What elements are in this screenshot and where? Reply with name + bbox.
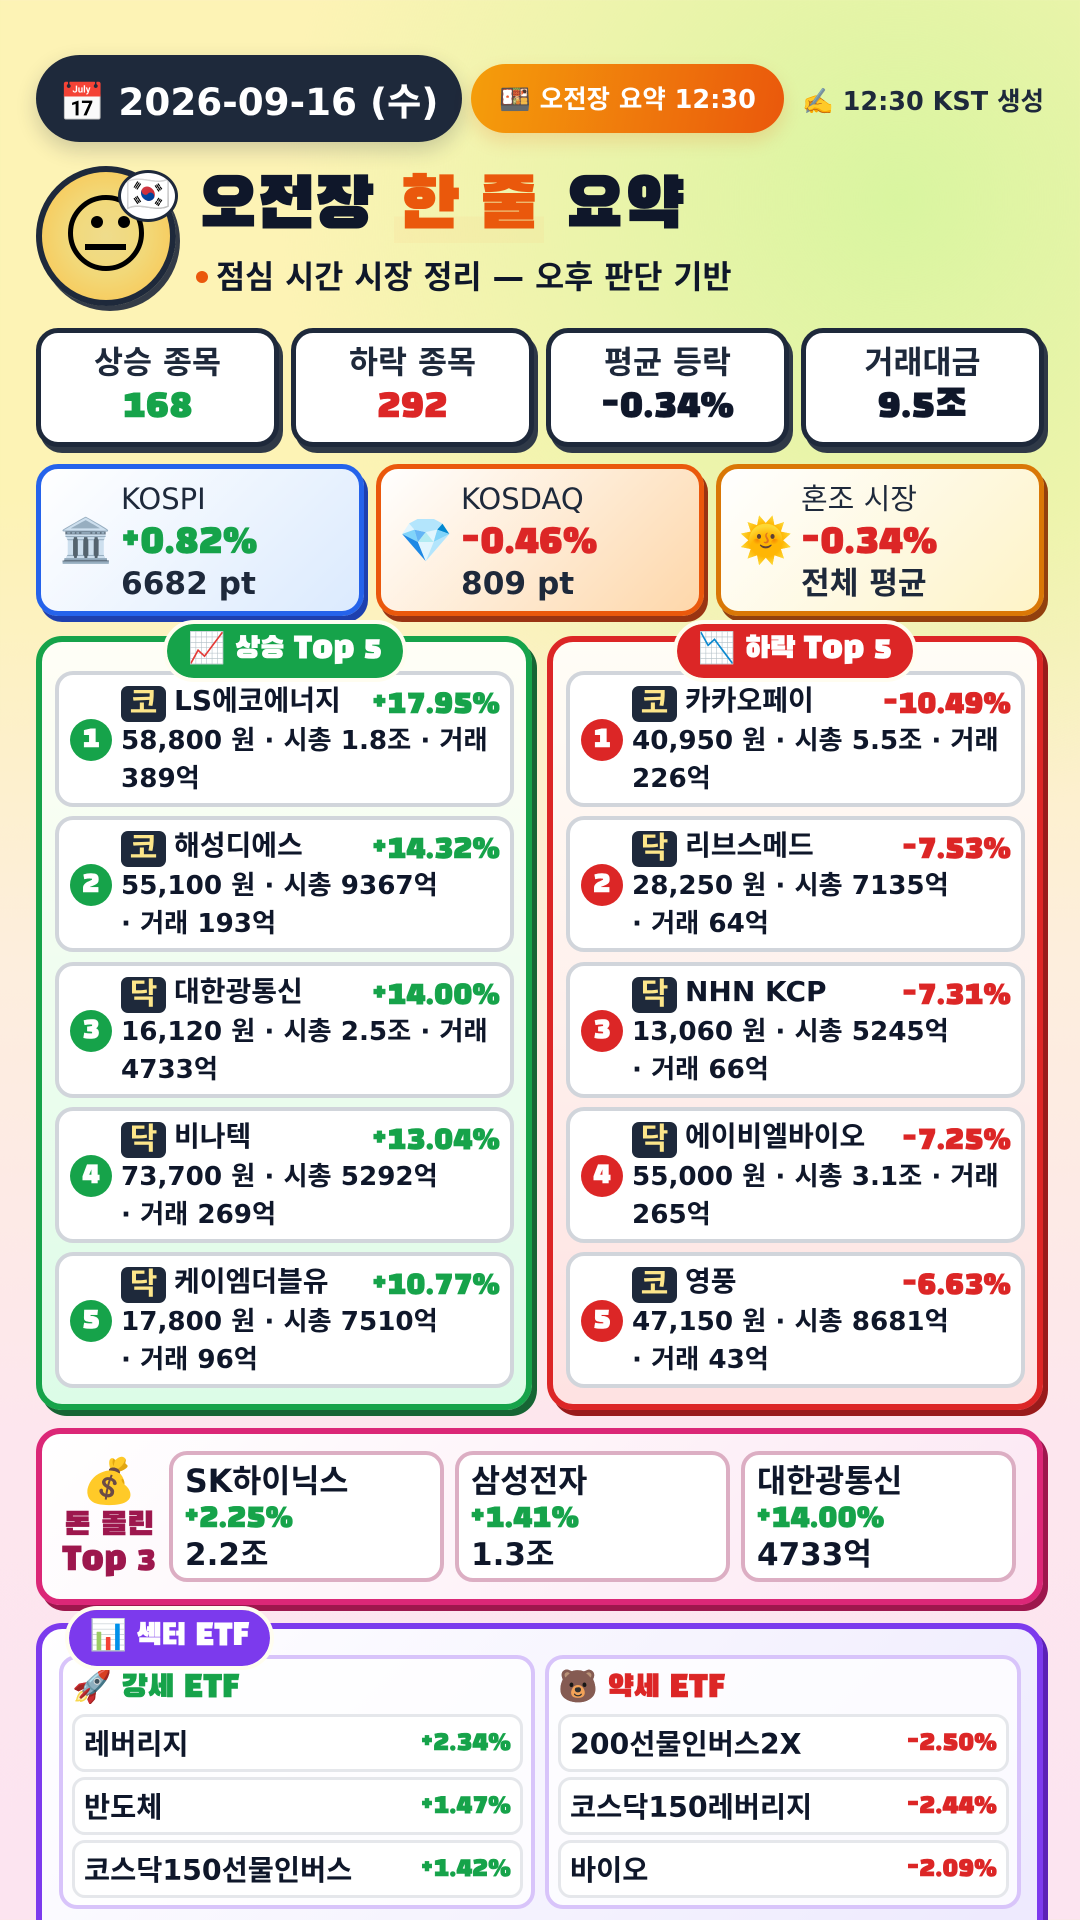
- money card 2: +1.41%: [470, 1502, 579, 1534]
- stat: turnover: 거래대금: [865, 345, 980, 381]
- weak row 3: 바이오: [570, 1854, 648, 1887]
- strong row 3: 코스닥150선물인버스: [84, 1854, 352, 1887]
- money label: [62, 1456, 156, 1577]
- weak row 3: [558, 1840, 1009, 1898]
- gainer 3: 16,120 원 · 시총 2.5조 · 거래: [121, 1017, 488, 1047]
- subtitle: 점심 시간 시장 정리 — 오후 판단 기반: [216, 260, 732, 296]
- stat: falling: 하락 종목: [349, 345, 476, 381]
- heading pill: gainers: [163, 620, 407, 682]
- money label: 돈 몰린: [64, 1510, 154, 1542]
- weak row 2: [558, 1777, 1009, 1835]
- gainer 4: · 거래 269억: [121, 1200, 276, 1230]
- money card 2: 1.3조: [471, 1537, 554, 1573]
- money card 3: +14.00%: [756, 1502, 884, 1534]
- strong row 3: +1.42%: [421, 1855, 511, 1882]
- loser 5: 영풍: [685, 1265, 737, 1298]
- money card 1: SK하이닉스: [185, 1464, 349, 1500]
- weak row 1: [558, 1714, 1009, 1772]
- strong heading: 🚀 강세 ETF: [72, 1672, 239, 1704]
- loser 2: 리브스메드: [685, 829, 814, 862]
- gainer 5: · 거래 96억: [121, 1345, 258, 1375]
- loser 2: 2: [593, 870, 611, 899]
- session pill: [471, 64, 784, 133]
- index card: KOSDAQ: 809 pt: [461, 566, 574, 602]
- index card: KOSPI: 🏛️: [59, 516, 113, 566]
- loser 4: 265억: [632, 1200, 711, 1230]
- index card: KOSPI: +0.82%: [121, 522, 257, 562]
- gainer 5: 케이엠더블유: [174, 1265, 329, 1298]
- gainer 2: 2: [82, 870, 100, 899]
- strong row 2: 반도체: [84, 1791, 162, 1824]
- strong row 1: +2.34%: [421, 1729, 511, 1756]
- loser 5: 5: [593, 1306, 611, 1335]
- loser 2: [566, 816, 1025, 952]
- money card 1: 2.2조: [185, 1537, 268, 1573]
- loser 3: 3: [593, 1016, 611, 1045]
- loser 2: 28,250 원 · 시총 7135억: [632, 871, 949, 901]
- stat: turnover: [801, 328, 1044, 447]
- loser 5: · 거래 43억: [632, 1345, 769, 1375]
- stat: average: [546, 328, 789, 447]
- strong row 2: +1.47%: [421, 1792, 511, 1819]
- gainer 5: +10.77%: [372, 1269, 500, 1301]
- gainer 2: [55, 816, 514, 952]
- gainer 5: 닥: [130, 1267, 157, 1302]
- panel: sector ETF: [36, 1623, 1043, 1920]
- stat: average: 평균 등락: [604, 345, 731, 381]
- loser 1: -10.49%: [883, 688, 1011, 720]
- loser 2: 닥: [641, 831, 668, 866]
- loser 1: 226억: [632, 764, 711, 794]
- gainer 4: 4: [82, 1161, 100, 1190]
- strong row 1: [72, 1714, 523, 1772]
- loser 3: 13,060 원 · 시총 5245억: [632, 1017, 949, 1047]
- gainer 3: 3: [82, 1016, 100, 1045]
- heading pill: gainers: 📈 상승 Top 5: [188, 635, 382, 665]
- weak row 1: -2.50%: [907, 1729, 997, 1756]
- strong row 2: [72, 1777, 523, 1835]
- gainer 4: 73,700 원 · 시총 5292억: [121, 1162, 438, 1192]
- money card 2: [455, 1451, 730, 1582]
- loser 3: -7.31%: [902, 979, 1011, 1011]
- weak row 2: 코스닥150레버리지: [570, 1791, 812, 1824]
- generated time: ✍️ 12:30 KST 생성: [802, 87, 1044, 117]
- gainer 3: 대한광통신: [174, 975, 303, 1008]
- loser 3: NHN KCP: [685, 975, 827, 1008]
- money card 2: 삼성전자: [471, 1464, 587, 1500]
- index card: mixed market: 전체 평균: [801, 566, 927, 602]
- loser 5: [566, 1252, 1025, 1388]
- panel: losers top 5: [547, 636, 1043, 1410]
- gainer 1: 1: [82, 725, 100, 754]
- loser 3: [566, 962, 1025, 1098]
- gainer 5: 17,800 원 · 시총 7510억: [121, 1307, 438, 1337]
- loser 4: 닥: [641, 1122, 668, 1157]
- loser 3: · 거래 66억: [632, 1055, 769, 1085]
- loser 1: [566, 671, 1025, 807]
- loser 1: 40,950 원 · 시총 5.5조 · 거래: [632, 726, 999, 756]
- loser 5: 코: [641, 1267, 668, 1302]
- box: weak ETF: [545, 1655, 1021, 1909]
- loser 4: 4: [593, 1161, 611, 1190]
- gainer 4: +13.04%: [372, 1124, 500, 1156]
- weak row 2: -2.44%: [907, 1792, 997, 1819]
- gainer 4: [55, 1107, 514, 1243]
- index card: KOSDAQ: [376, 464, 704, 616]
- stat: turnover: 9.5조: [878, 387, 967, 426]
- gainer 3: [55, 962, 514, 1098]
- gainer 1: 코: [130, 686, 157, 721]
- index card: KOSPI: KOSPI: [121, 482, 206, 516]
- gainer 3: 닥: [130, 977, 157, 1012]
- loser 2: · 거래 64억: [632, 909, 769, 939]
- money label: Top 3: [62, 1545, 156, 1577]
- index card: KOSPI: 6682 pt: [121, 566, 256, 602]
- money card 3: 4733억: [757, 1537, 872, 1573]
- stat: rising: 168: [122, 387, 193, 426]
- mascot face: [36, 166, 180, 311]
- stat: rising: 상승 종목: [94, 345, 221, 381]
- money label: 💰: [82, 1456, 136, 1507]
- gainer 2: 55,100 원 · 시총 9367억: [121, 871, 438, 901]
- gainer 4: 비나텍: [174, 1120, 251, 1153]
- loser 4: [566, 1107, 1025, 1243]
- box: strong ETF: [59, 1655, 535, 1909]
- gainer 5: [55, 1252, 514, 1388]
- money card 3: 대한광통신: [757, 1464, 902, 1500]
- stat: average: -0.34%: [601, 387, 734, 426]
- gainer 3: +14.00%: [372, 979, 500, 1011]
- loser 4: -7.25%: [902, 1124, 1011, 1156]
- gainer 3: 4733억: [121, 1055, 218, 1085]
- strong row 3: [72, 1840, 523, 1898]
- loser 3: 닥: [641, 977, 668, 1012]
- stat: falling: [291, 328, 534, 447]
- gainer 1: +17.95%: [372, 688, 500, 720]
- index card: mixed market: 혼조 시장: [801, 482, 917, 516]
- loser 1: 코: [641, 686, 668, 721]
- strong row 1: 레버리지: [84, 1728, 188, 1761]
- stat: rising: [36, 328, 279, 447]
- gainer 2: 해성디에스: [174, 829, 303, 862]
- badge: korean flag: [118, 170, 178, 222]
- gainer 1: 58,800 원 · 시총 1.8조 · 거래: [121, 726, 488, 756]
- money card 1: +2.25%: [184, 1502, 293, 1534]
- loser 5: -6.63%: [902, 1269, 1011, 1301]
- gainer 2: +14.32%: [372, 833, 500, 865]
- index card: KOSDAQ: 💎: [399, 516, 453, 566]
- date pill: [36, 55, 462, 142]
- loser 4: 55,000 원 · 시총 3.1조 · 거래: [632, 1162, 999, 1192]
- session pill: 🍱 오전장 요약 12:30: [499, 85, 756, 115]
- title: 오전장 한 줄 요약: [199, 173, 683, 243]
- loser 1: 1: [593, 725, 611, 754]
- gainer 2: · 거래 193억: [121, 909, 276, 939]
- weak heading: 🐻 약세 ETF: [558, 1672, 725, 1704]
- weak row 1: 200선물인버스2X: [570, 1728, 802, 1761]
- index card: mixed market: 🌞: [739, 516, 793, 566]
- date pill: 📅 2026-09-16 (수): [59, 80, 438, 124]
- index card: KOSDAQ: KOSDAQ: [461, 482, 584, 516]
- gainer 1: LS에코에너지: [174, 684, 341, 717]
- panel: money top 3: [36, 1428, 1043, 1605]
- money card 3: [741, 1451, 1016, 1582]
- index card: mixed market: -0.34%: [801, 522, 937, 562]
- loser 5: 47,150 원 · 시총 8681억: [632, 1307, 949, 1337]
- gainer 5: 5: [82, 1306, 100, 1335]
- gainer 1: [55, 671, 514, 807]
- gainer 2: 코: [130, 831, 157, 866]
- stat: falling: 292: [377, 387, 448, 426]
- heading pill: losers: 📉 하락 Top 5: [698, 635, 892, 665]
- index card: KOSPI: [36, 464, 364, 616]
- badge: korean flag: 🇰🇷: [126, 174, 170, 215]
- loser 2: -7.53%: [902, 833, 1011, 865]
- panel: gainers top 5: [36, 636, 532, 1410]
- gainer 4: 닥: [130, 1122, 157, 1157]
- heading pill: sector ETF: [65, 1606, 274, 1670]
- gainer 1: 389억: [121, 764, 200, 794]
- weak row 3: -2.09%: [907, 1855, 997, 1882]
- index card: mixed market: [716, 464, 1044, 616]
- index card: KOSDAQ: -0.46%: [461, 522, 597, 562]
- money card 1: [169, 1451, 444, 1582]
- loser 1: 카카오페이: [685, 684, 814, 717]
- heading pill: sector ETF: 📊 섹터 ETF: [90, 1622, 249, 1652]
- heading pill: losers: [673, 620, 917, 682]
- loser 4: 에이비엘바이오: [685, 1120, 865, 1153]
